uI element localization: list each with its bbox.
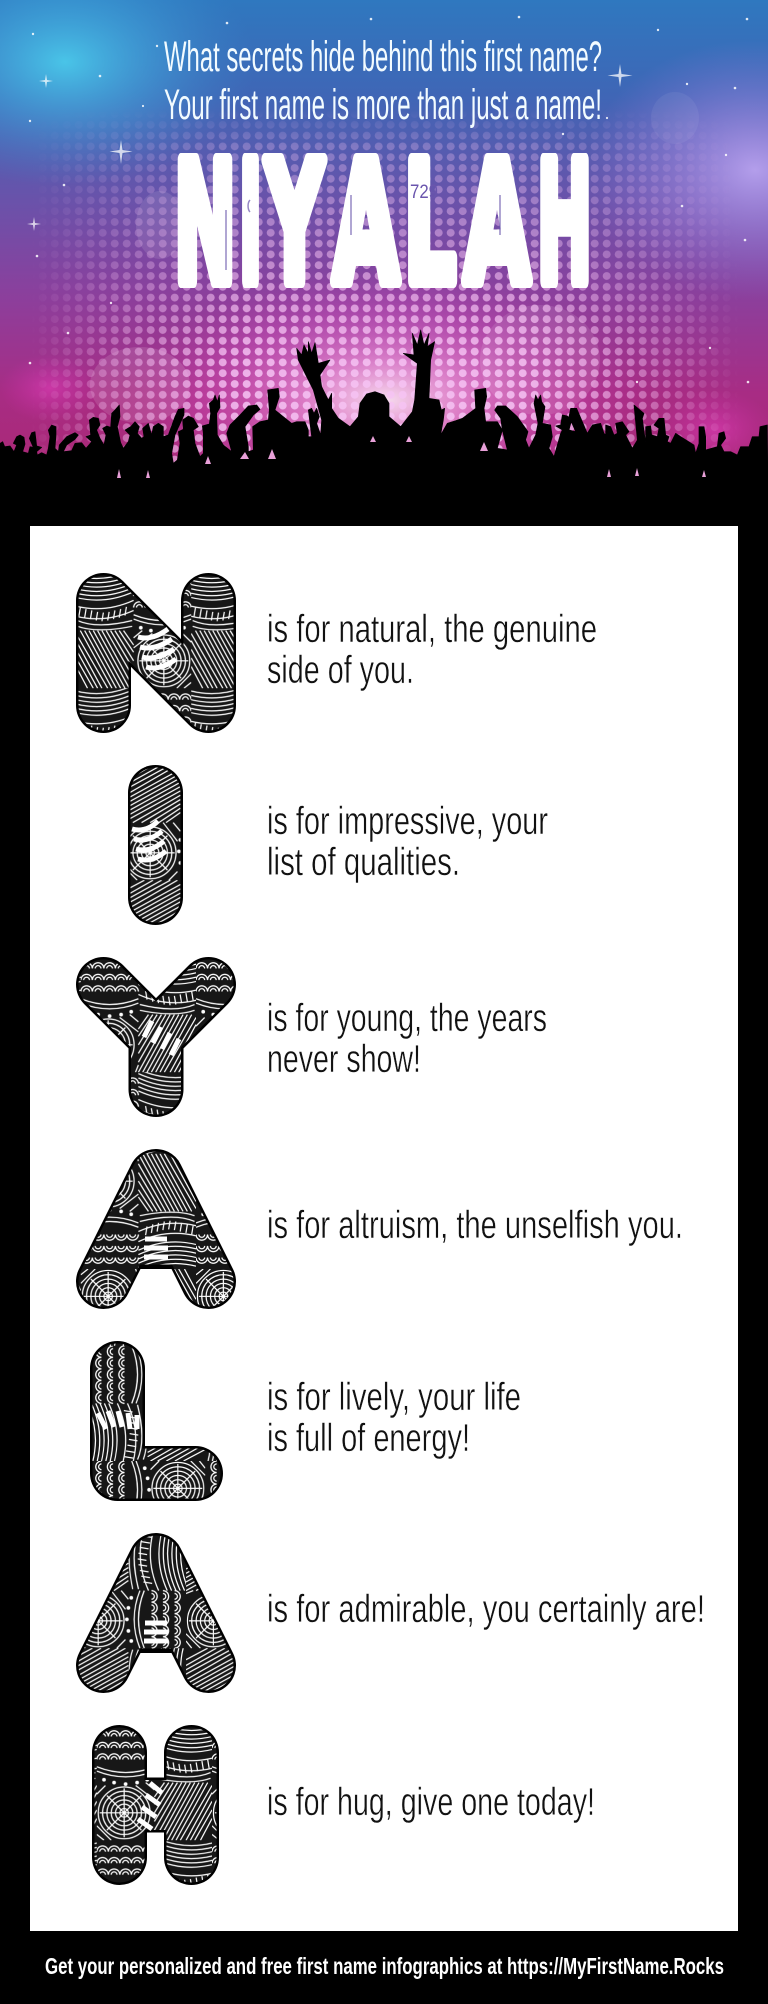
letter H row (120, 1752, 595, 1858)
icon: zentangle letter A second (104, 1560, 208, 1666)
icon: zentangle letter A (104, 1176, 208, 1282)
name heading NIYALAH: N (174, 128, 236, 321)
letter Y row (104, 984, 547, 1090)
header concert background (0, 0, 768, 463)
icon: zentangle letter I (132, 792, 166, 898)
text: H meaning: is for hug, give one today! (267, 1781, 595, 1824)
text: N meaning: is for natural, the genuine (267, 608, 597, 651)
text: Y meaning (267, 997, 547, 1081)
icon: zentangle letter N (104, 600, 208, 706)
name heading NIYALAH: L (404, 128, 456, 321)
name heading NIYALAH: A (333, 128, 399, 321)
icon: zentangle letter H (120, 1752, 192, 1858)
name heading NIYALAH (174, 128, 592, 321)
name heading NIYALAH: I (239, 128, 262, 321)
text: Y meaning: is for young, the years (267, 997, 547, 1040)
white content panel (30, 526, 738, 1931)
second letter A row (104, 1560, 705, 1666)
letter N row (104, 600, 597, 706)
letter L row (98, 1368, 521, 1474)
name heading NIYALAH: A (464, 128, 530, 321)
text: L meaning: is full of energy! (267, 1417, 470, 1460)
crowd silhouette (0, 330, 768, 500)
text: L meaning: is for lively, your life (267, 1376, 521, 1419)
name heading NIYALAH: 729 (410, 182, 438, 203)
letter A row (104, 1176, 683, 1282)
text: L meaning (267, 1376, 521, 1460)
title question lines (164, 33, 602, 129)
text: I meaning: list of qualities. (267, 841, 460, 884)
icon: zentangle letter L (98, 1368, 196, 1474)
letter I row (132, 792, 548, 898)
text: N meaning (267, 608, 597, 692)
text: H (537, 128, 592, 321)
name heading NIYALAH: Y (265, 128, 324, 321)
text: I meaning: is for impressive, your (267, 800, 548, 843)
text: Y meaning: never show! (267, 1038, 421, 1081)
text: I meaning (267, 800, 548, 884)
icon: zentangle letter Y (104, 984, 208, 1090)
text: N meaning: side of you. (267, 649, 414, 692)
